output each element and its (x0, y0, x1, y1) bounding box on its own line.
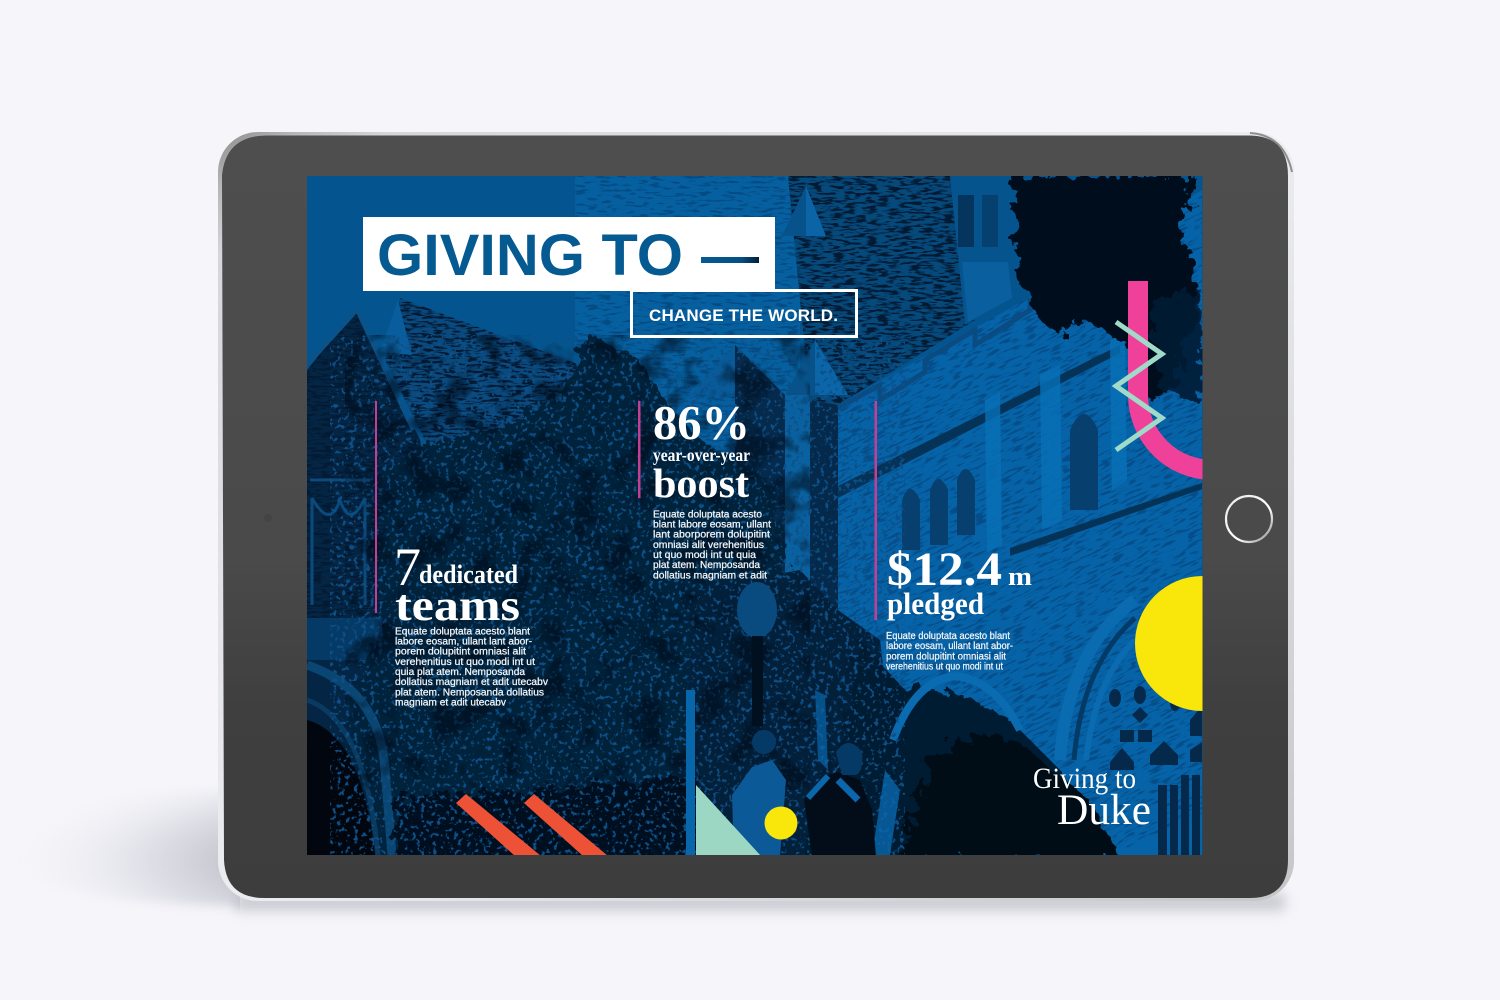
body text: Equate doluptata acesto blant (395, 626, 530, 638)
small gable (380, 300, 412, 355)
title block (363, 217, 775, 291)
tower dark band (735, 345, 785, 574)
logo: Giving to Duke: Duke (1057, 787, 1151, 834)
home button (1226, 496, 1272, 542)
body text: Equate doluptata acesto blant (886, 631, 1010, 642)
students (732, 730, 876, 856)
body text: labore eosam, ullant lant abor- (886, 641, 1013, 652)
tablet body (218, 132, 1294, 901)
large arch (1060, 600, 1135, 760)
decorative stripes: red (456, 794, 608, 856)
screen (307, 176, 1202, 855)
stat: 86% year-over-year boost: 86% (653, 395, 750, 450)
camera (264, 514, 272, 522)
body text: porem dolupitint omniasi alit (395, 647, 526, 658)
body text: verehenitius ut quo modi int ut (395, 657, 535, 668)
bottom-left arch (307, 665, 392, 855)
small arch (893, 676, 1020, 740)
logo: Giving to Duke (1033, 762, 1151, 834)
stat: $12.4 m pledged: $12.4 (887, 543, 1002, 596)
left house roof (385, 298, 576, 446)
body text: verehenitius ut quo modi int ut (886, 662, 1003, 672)
lower spires (690, 340, 848, 395)
stat: $12.4 m pledged (886, 543, 1032, 672)
subtitle box (632, 290, 856, 336)
columns (686, 690, 900, 855)
stat: 86% year-over-year boost: year-over-year (653, 445, 750, 465)
stat: 86% year-over-year boost: boost (653, 460, 749, 506)
gable trim (307, 310, 413, 430)
stat: 7 dedicated teams: teams (395, 581, 520, 630)
house lower wall (307, 618, 382, 660)
decorative triangle: mint (696, 785, 761, 856)
body text (886, 631, 1013, 672)
subtitle box: CHANGE THE WORLD. (649, 306, 838, 325)
tablet mockup scene (90, 132, 1294, 916)
window tower (950, 176, 1016, 325)
left house wall (307, 314, 421, 855)
decorative arc: pink (1138, 281, 1213, 470)
stat: 7 dedicated teams: dedicated (419, 560, 518, 589)
lancet windows (902, 414, 1098, 550)
light column (785, 395, 838, 610)
stat divider lines (375, 401, 877, 620)
dark brick tower (788, 176, 978, 416)
body text (653, 510, 771, 581)
stat: 7 dedicated teams: 7 (394, 537, 421, 597)
body text: Equate doluptata acesto (653, 510, 762, 520)
lamp post (737, 582, 777, 726)
central tree (330, 335, 810, 855)
student right (804, 772, 876, 856)
pier highlights (985, 330, 1127, 552)
body text: labore eosam, ullant lant abor- (395, 636, 532, 648)
body text: porem dolupitint omniasi alit (886, 652, 1006, 662)
body text: magniam et adit utecabv (395, 698, 506, 708)
gothic tracery (1109, 686, 1202, 855)
body text: blant labore eosam, ullant (653, 520, 771, 530)
body text: quia plat atem. Nemposanda (395, 667, 525, 678)
right building wall (838, 190, 1202, 855)
stat: 86% year-over-year boost (653, 395, 771, 581)
decorative circle: yellow (764, 806, 798, 840)
stat: 7 dedicated teams (394, 537, 548, 708)
bottom walkway shade (388, 774, 704, 855)
body text: plat atem. Nemposanda (653, 560, 760, 571)
upper light tower (575, 176, 800, 462)
body text: dollatius magniam et adit (653, 570, 767, 581)
stat: $12.4 m pledged: m (1008, 562, 1032, 591)
string course (838, 345, 1120, 498)
title block: GIVING TO (377, 223, 683, 288)
body text: ut quo modi int ut quia (653, 550, 756, 561)
body text: omniasi alit verehenitius (653, 540, 764, 551)
stat: $12.4 m pledged: pledged (887, 586, 984, 621)
texture: foliage specks (330, 335, 905, 855)
body text: lant aborporem dolupitint (653, 530, 770, 541)
decorative semicircle: yellow (1135, 576, 1202, 711)
house window (310, 480, 370, 605)
body text: plat atem. Nemposanda dollatius (395, 687, 544, 698)
drop shadow (0, 790, 1285, 911)
student left (732, 760, 786, 856)
photo background: campus building in blue duotone (307, 176, 1202, 855)
upper spire (782, 186, 826, 236)
right-side bushes (883, 666, 1118, 855)
logo: Giving to Duke: Giving to (1033, 762, 1136, 795)
body text (395, 626, 548, 708)
top-right tree (1012, 176, 1202, 405)
decorative zigzag: mint (1116, 322, 1162, 450)
parapet cap (838, 298, 1030, 408)
body text: dollatius magniam et adit utecabv (395, 677, 548, 688)
dark lower foliage backdrop (695, 570, 883, 855)
